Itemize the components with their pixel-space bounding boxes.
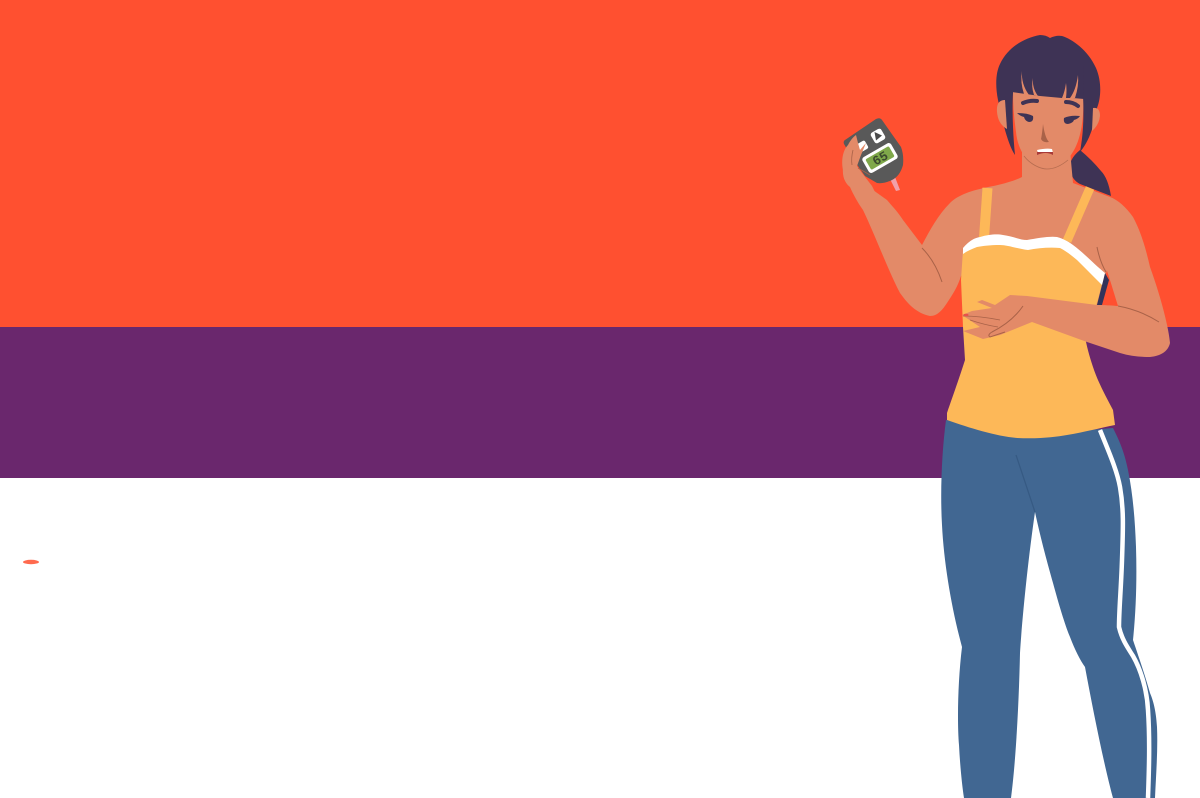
panel: orange top band bbox=[0, 0, 1200, 327]
eyes bbox=[1017, 113, 1080, 124]
meter test strip bbox=[890, 177, 900, 191]
eyebrows bbox=[1023, 101, 1078, 106]
fringe highlights bbox=[1021, 71, 1078, 98]
ponytail bbox=[1070, 150, 1111, 196]
face bbox=[1013, 92, 1083, 168]
ears bbox=[997, 100, 1100, 131]
yellow top bbox=[947, 243, 1115, 438]
mouth bbox=[1037, 149, 1053, 155]
fringe bbox=[1012, 66, 1084, 99]
fingers gripping meter bbox=[842, 135, 875, 192]
torso and neck skin bbox=[965, 150, 1110, 305]
meter button bbox=[870, 128, 886, 144]
hair back layer bbox=[996, 35, 1100, 155]
glucose meter bbox=[844, 118, 903, 191]
finger creases bbox=[852, 150, 870, 175]
meter body bbox=[844, 118, 903, 183]
raised arm with hand bbox=[843, 168, 990, 316]
figure: woman checking blood sugar bbox=[842, 35, 1170, 798]
raised arm elbow crease bbox=[922, 248, 942, 282]
meter screen: 65 bbox=[870, 148, 891, 169]
dark under-strap bbox=[1097, 273, 1109, 305]
bent arm with hand bbox=[962, 197, 1170, 357]
panel: purple middle band bbox=[0, 327, 1200, 478]
panel: white bottom band bbox=[0, 478, 1200, 798]
top straps bbox=[984, 188, 1090, 241]
leggings bbox=[941, 420, 1157, 798]
white trim of top bbox=[963, 234, 1105, 285]
nose bbox=[1041, 124, 1049, 142]
small red mark bbox=[23, 560, 39, 564]
meter secondary button bbox=[857, 140, 869, 152]
jaw line bbox=[1024, 156, 1068, 169]
